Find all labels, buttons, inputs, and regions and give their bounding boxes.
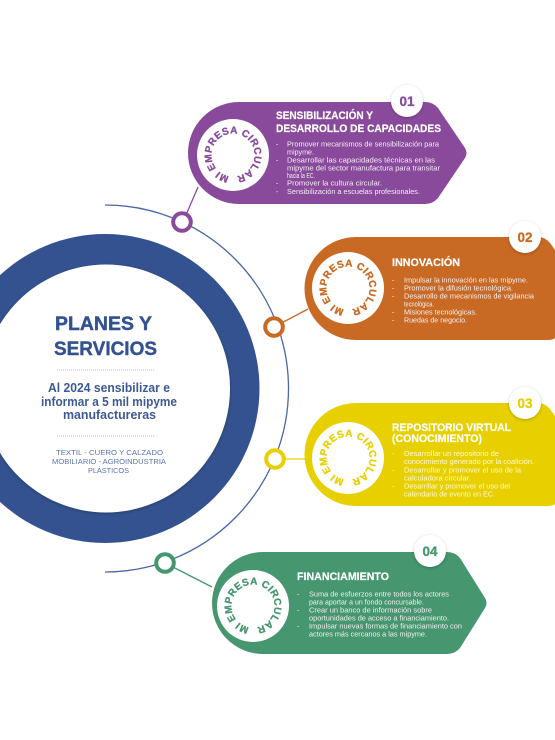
bullets 4: - <box>297 623 300 630</box>
bullets 2: Impulsar la innovación en las mipyme. <box>404 277 528 284</box>
node 4 <box>156 554 174 572</box>
bullets 3: - <box>392 451 395 458</box>
bullets 3: Desarrollar y promover el uso de la <box>404 467 521 474</box>
bullets 1: - <box>276 181 279 188</box>
bullets 1: hacia la EC. <box>287 173 315 180</box>
thin arc <box>105 205 288 572</box>
badge circle 2: MI EMPRESA CIRCULAR <box>319 259 377 316</box>
bullets 3 <box>392 451 534 498</box>
bullets 1: - <box>276 189 279 196</box>
title 3: REPOSITORIO VIRTUAL <box>392 422 511 434</box>
bullets 3: Desarrillar y promover el uso del <box>404 483 510 490</box>
badge circle 1: MI EMPRESA CIRCULAR <box>204 126 262 183</box>
title 3: (CONOCIMIENTO) <box>392 433 482 445</box>
number 02: 02 <box>517 230 533 245</box>
bullets 3: calculadora circular. <box>404 475 471 482</box>
bullets 1: Sensibilización a escuelas profesionales. <box>287 189 420 196</box>
bullets 3: Desarrollar un repositorio de <box>404 451 499 458</box>
badge circle 1 <box>197 119 269 191</box>
number 03 <box>509 387 541 419</box>
title 2: INNOVACIÓN <box>392 256 460 269</box>
card 2: innovación <box>263 220 555 340</box>
number 02 <box>509 221 541 253</box>
bullets 1: Promover la cultura circular. <box>287 181 382 188</box>
goal text <box>41 381 177 422</box>
number 01 <box>391 85 423 117</box>
bullets 2: - <box>392 285 395 292</box>
bullets 1: mipyme del sector manufactura para transitar <box>287 166 441 173</box>
bullets 2: Promover la difusión tecnológica. <box>404 285 513 292</box>
bullets 2: - <box>392 309 395 316</box>
goal text: informar a 5 mil mipyme <box>41 395 177 409</box>
sectors text: TEXTIL - CUERO Y CALZADO <box>56 448 163 457</box>
node 2 <box>265 318 283 336</box>
card 1: sensibilización <box>171 84 466 233</box>
number 04 <box>414 535 446 567</box>
title 3 <box>392 422 511 445</box>
bullets 1: Promover mecanismos de sensibilización para <box>287 141 439 148</box>
bullets 1: Desarrollar las capacidades técnicas en las <box>287 157 436 164</box>
center text block <box>41 314 177 475</box>
sectors text: PLÁSTICOS <box>88 466 129 475</box>
bullets 4: Impulsar nuevas formas de financiamiento con <box>309 623 462 630</box>
bullets 4: actores más cercanos a las mipyme. <box>309 632 427 639</box>
title 1 <box>276 109 441 135</box>
heading: planes y servicios: SERVICIOS <box>54 339 157 360</box>
title 1: DESARROLLO DE CAPACIDADES <box>276 123 441 135</box>
number 01: 01 <box>399 94 415 109</box>
node 1 <box>173 213 191 231</box>
card 4: financiamiento <box>154 534 486 654</box>
blue ring <box>0 234 260 543</box>
heading: planes y servicios: PLANES Y <box>55 314 152 335</box>
bullets 2 <box>392 277 534 324</box>
bullets 2: - <box>392 277 395 284</box>
card 3: repositorio <box>264 386 555 506</box>
number 03: 03 <box>517 396 533 411</box>
badge circle 3 <box>312 422 384 494</box>
bullets 3: conocimiento generado por la coalición. <box>404 459 534 466</box>
badge circle 3: MI EMPRESA CIRCULAR <box>319 429 377 486</box>
bullets 1: - <box>276 157 279 164</box>
bullets 4: Crear un banco de información sobre <box>309 608 432 615</box>
bullets 2: Misiones tecnológicas. <box>404 309 477 316</box>
title 4: FINANCIAMIENTO <box>297 571 389 583</box>
badge circle 2 <box>312 252 384 324</box>
bullets 1 <box>276 141 441 196</box>
bullets 1: mipyme. <box>287 149 314 156</box>
bullets 3: - <box>392 483 395 490</box>
goal text: Al 2024 sensibilizar e <box>48 381 170 395</box>
bullets 3: calendario de evento en EC. <box>404 491 495 498</box>
bullets 4: - <box>297 592 300 599</box>
title 1: SENSIBILIZACIÓN Y <box>276 109 374 122</box>
bullets 4: oportunidades de acceso a financiamiento. <box>309 615 449 622</box>
number 04: 04 <box>422 544 438 559</box>
bullets 4: - <box>297 608 300 615</box>
bullets 1: - <box>276 141 279 148</box>
heading: planes y servicios <box>54 314 157 360</box>
bullets 2: tecnológica. <box>404 301 434 308</box>
bullets 2: - <box>392 317 395 324</box>
bullets 3: - <box>392 467 395 474</box>
bullets 2: Ruedas de negocio. <box>404 317 467 324</box>
sectors text <box>52 448 166 475</box>
badge circle 4 <box>217 570 289 642</box>
node 3 <box>266 450 284 468</box>
bullets 4: para aportar a un fondo concursable. <box>309 599 424 606</box>
sectors text: MOBILIARIO - AGROINDUSTRIA <box>52 457 166 466</box>
bullets 2: - <box>392 293 395 300</box>
bullets 4 <box>297 592 462 639</box>
badge circle 4: MI EMPRESA CIRCULAR <box>224 577 282 634</box>
bullets 4: Suma de esfuerzos entre todos los actores <box>309 592 450 599</box>
goal text: manufactureras <box>63 408 156 422</box>
bullets 2: Desarrollo de mecanismos de vigilancia <box>404 293 534 300</box>
